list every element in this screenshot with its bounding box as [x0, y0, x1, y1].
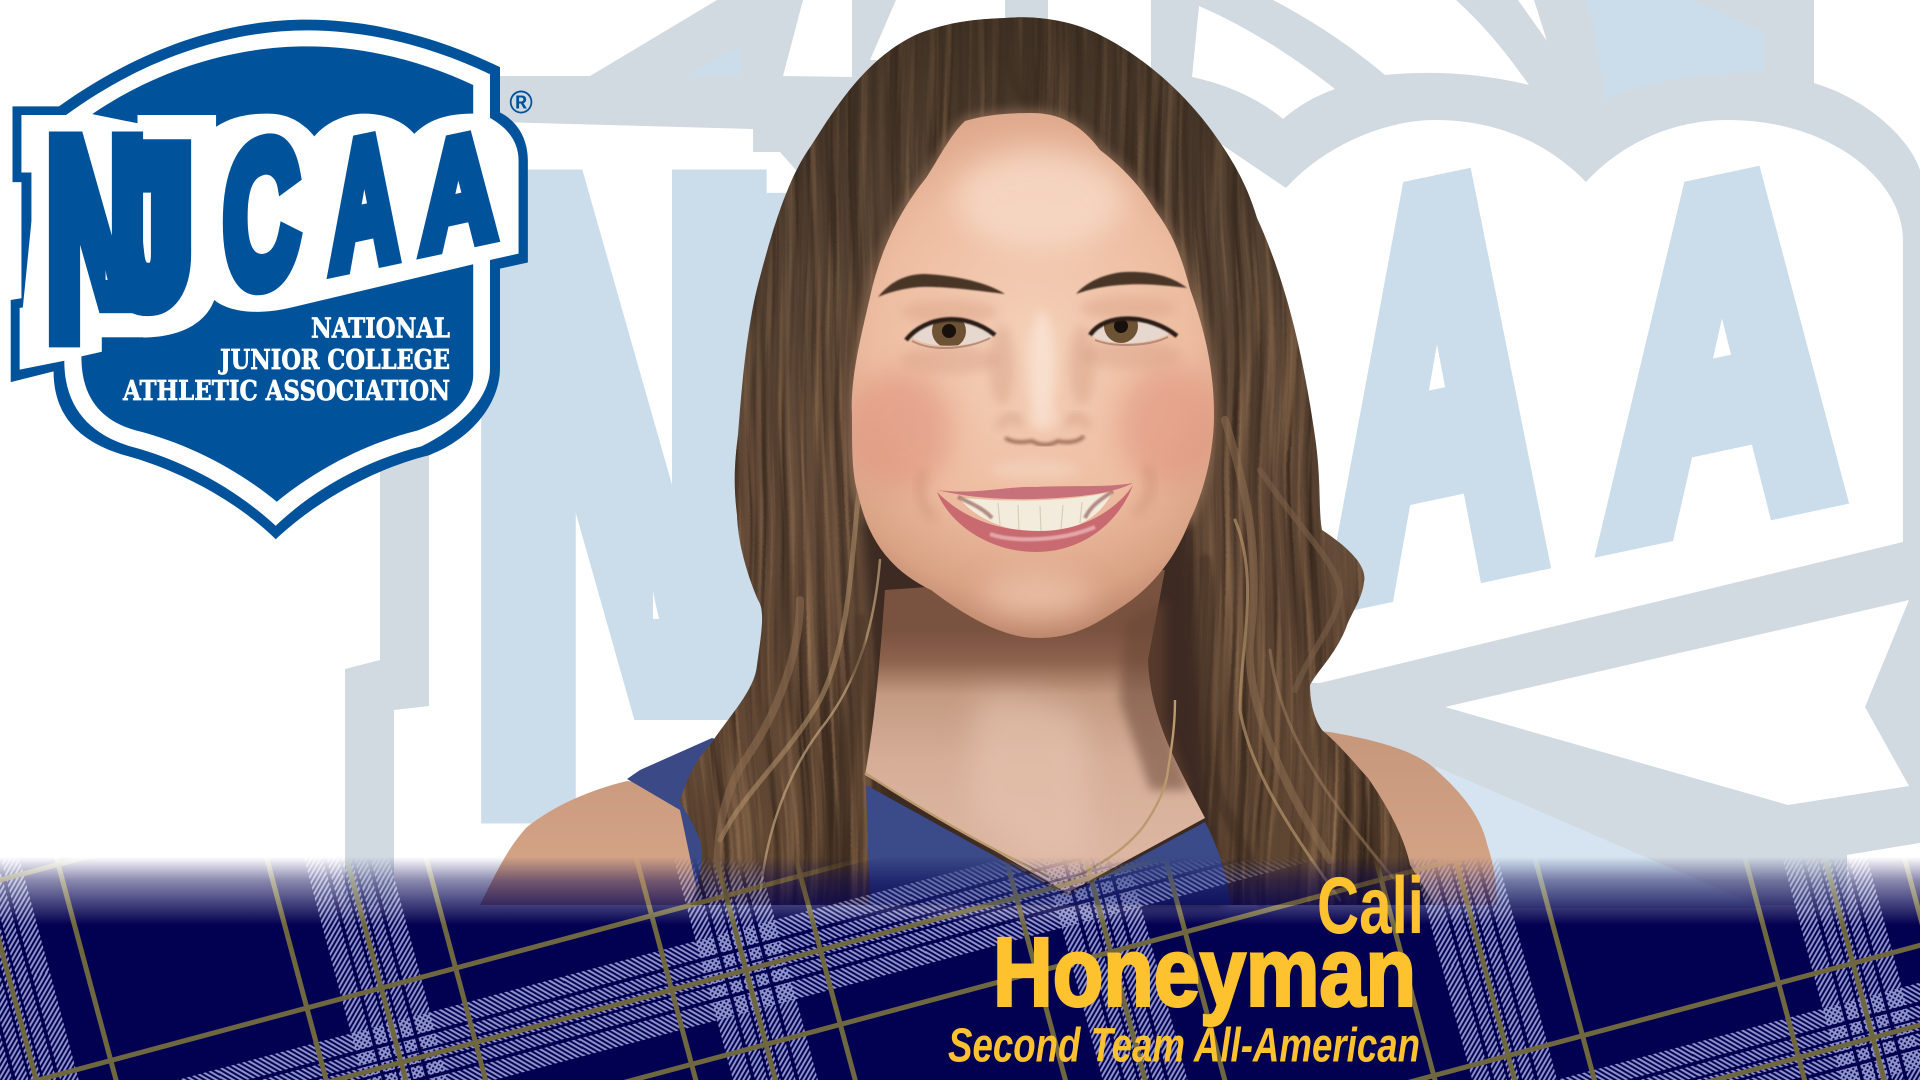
logo: NJCAA shield [11, 20, 533, 539]
face: right eyebrow [1076, 272, 1187, 294]
logo: association name: JUNIOR COLLEGE [218, 345, 450, 376]
logo: NJCAA wordmark [47, 86, 496, 392]
watermark: lower white corner [1847, 843, 1920, 905]
watermark: ribbon tail [1445, 600, 1909, 805]
tartan band [0, 840, 1920, 1080]
logo: blue outer border [11, 20, 528, 539]
portrait: necklace [865, 700, 1175, 883]
logo: registered mark: ® [509, 84, 533, 120]
logo: NJCAA wordmark: J [112, 109, 191, 345]
portrait: dark hair behind neck [862, 520, 1225, 905]
portrait: dark crown shading [700, 17, 1322, 905]
player name and honor [948, 861, 1424, 1073]
honor: Second Team All-American [948, 1020, 1420, 1073]
logo: blue shield field [81, 46, 473, 502]
face: soft hairline edge [852, 113, 1214, 520]
watermark: basketball panels [687, 0, 1764, 119]
logo: white band [20, 30, 519, 526]
logo: association name [122, 314, 450, 407]
watermark: pale blue sliver [1435, 766, 1763, 908]
watermark: wordmark text: J [672, 98, 912, 814]
portrait [480, 17, 1497, 905]
logo: NJCAA wordmark: A [331, 97, 398, 307]
face: nose [1000, 405, 1088, 445]
portrait: neck side shadow [1120, 600, 1190, 790]
tartan: navy base [0, 840, 1920, 1080]
logo: NJCAA wordmark: C [223, 95, 299, 336]
portrait: neck and chest [865, 570, 1205, 893]
portrait: hair mass [680, 17, 1435, 905]
logo: association name: NATIONAL [311, 314, 450, 344]
watermark: wordmark text: A [1336, 66, 1538, 701]
face: mouth [937, 483, 1133, 552]
face: skin base [852, 113, 1214, 638]
logo: NJCAA wordmark: N [47, 86, 145, 392]
watermark: wordmark text: N [474, 32, 774, 959]
portrait: top strap [627, 738, 780, 905]
portrait: face [848, 113, 1222, 638]
logo: association name: ATHLETIC ASSOCIATION [122, 376, 450, 407]
portrait: neck highlight [970, 696, 1090, 860]
last name: Honeyman [993, 918, 1416, 1027]
first name: Cali [1317, 861, 1424, 951]
portrait: left shoulder [480, 781, 720, 905]
watermark: white halo behind letters [1200, 120, 1903, 683]
face: right eye [1090, 309, 1177, 345]
watermark: gray logo outline [500, 0, 1920, 905]
watermark: gray left stem [345, 440, 429, 905]
tartan: plaid stripes [0, 840, 1920, 1080]
portrait: neckline top [866, 785, 1230, 905]
portrait: right shoulder [1300, 730, 1497, 905]
logo: NJCAA wordmark: A [421, 101, 496, 284]
watermark: wordmark text: C [1009, 55, 1241, 786]
face: left eye [906, 314, 995, 348]
watermark: large NJCAA logo [345, 0, 1920, 959]
face: left eyebrow [878, 274, 1005, 297]
portrait: hair strands [718, 24, 1395, 900]
watermark: wordmark text [474, 32, 1835, 959]
watermark: wordmark text: A [1609, 75, 1835, 629]
face: cheek and nose shading [848, 150, 1222, 617]
logo: white wordmark backing [21, 114, 493, 361]
